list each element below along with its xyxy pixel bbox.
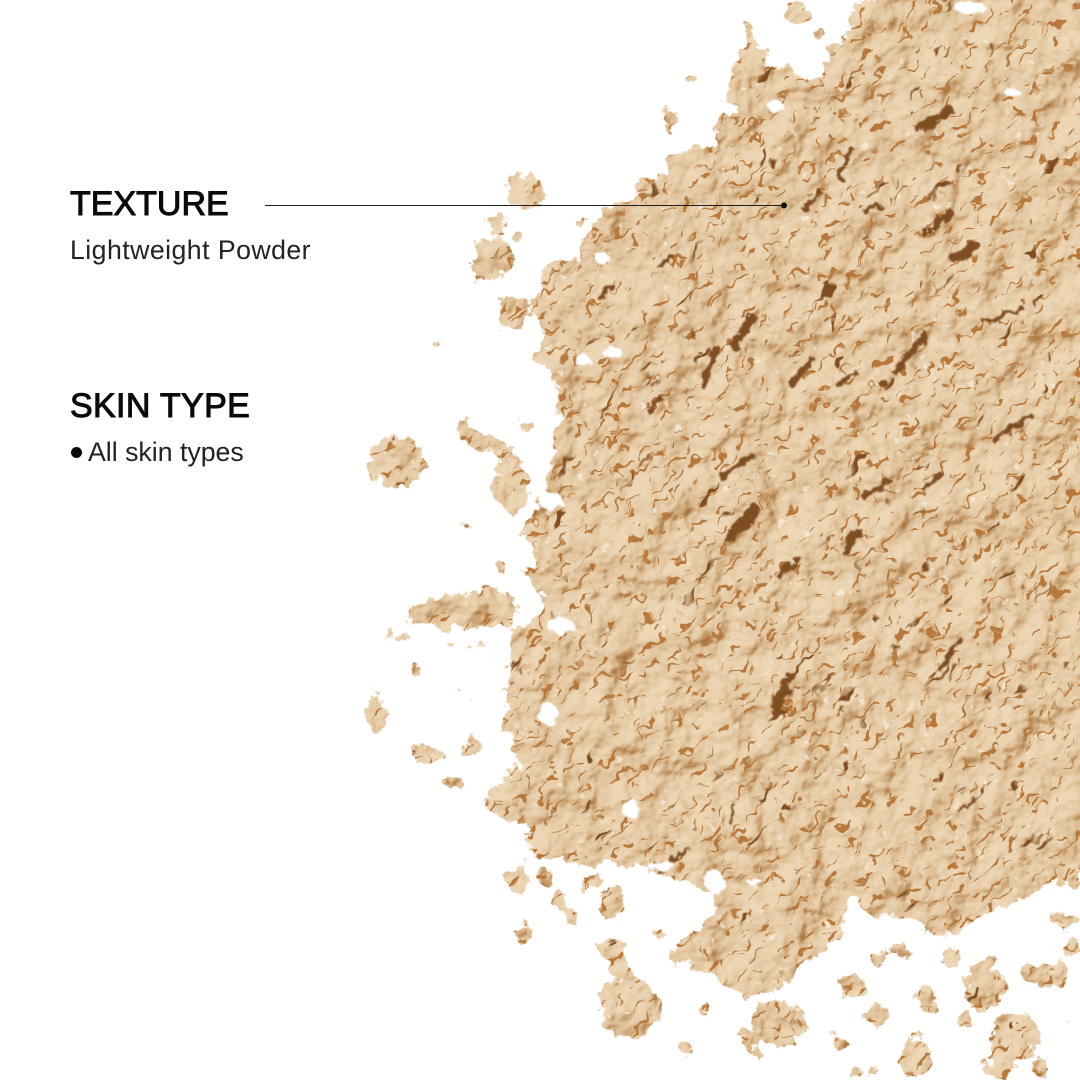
deep shadow flecks: [484, 484, 596, 596]
white gaps in powder: [537, 2, 1020, 894]
dark cracks: [600, 110, 1052, 860]
powder mass: [364, 0, 1080, 1080]
heading: texture: TEXTURE: [70, 185, 229, 223]
text: lightweight powder: Lightweight Powder: [70, 235, 311, 265]
powder pile illustration: [364, 0, 1080, 1080]
orange flecks: [484, 484, 596, 596]
heading: skin type: SKIN TYPE: [70, 387, 250, 425]
bullet: all skin types: All skin types: [88, 437, 244, 467]
